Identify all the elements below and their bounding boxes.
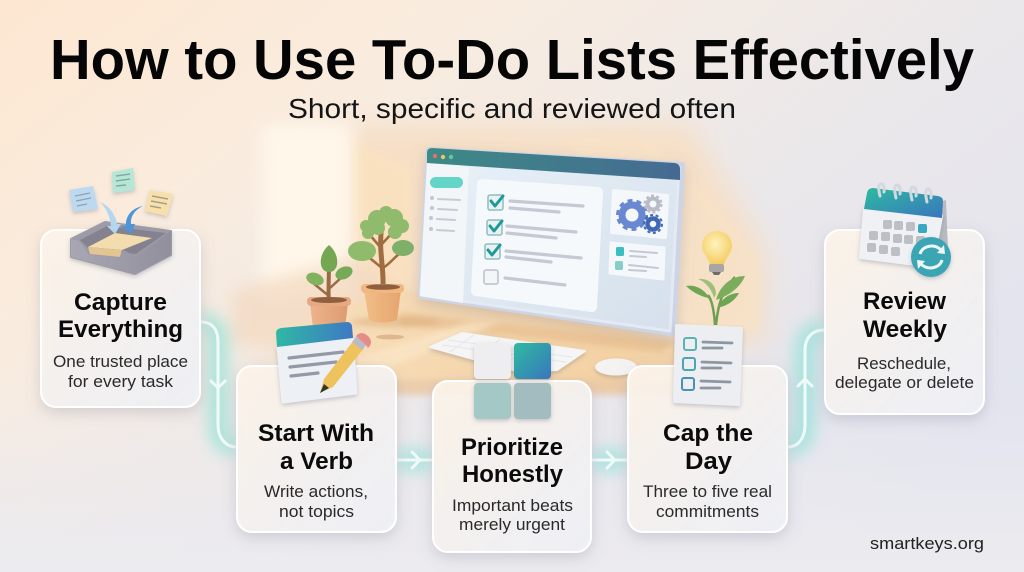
heading: Prioritize	[461, 434, 563, 461]
connectors	[201, 322, 824, 468]
desk	[235, 290, 705, 392]
icon: note and pencil	[276, 322, 371, 402]
heading	[663, 420, 753, 475]
heading: Day	[685, 448, 733, 475]
heading: Capture	[74, 289, 167, 316]
card: Capture Everything	[41, 168, 200, 407]
icon: inbox tray with notes	[69, 168, 173, 274]
description: not topics	[279, 503, 354, 521]
title bar	[427, 148, 680, 180]
icon: bulb and plant checklist	[675, 231, 745, 404]
description: delegate or delete	[835, 374, 974, 392]
keyboard	[430, 333, 585, 372]
card: Start With a Verb	[237, 322, 396, 532]
heading: a Verb	[280, 448, 353, 475]
small potted plant	[304, 245, 355, 328]
description: commitments	[656, 503, 759, 521]
window light beam	[262, 125, 352, 300]
card: Review Weekly	[825, 184, 984, 414]
sidebar	[420, 163, 469, 303]
description	[53, 353, 188, 391]
desk scene background	[232, 125, 765, 396]
window controls	[433, 154, 453, 159]
heading	[461, 434, 564, 488]
description: for every task	[68, 373, 174, 391]
task panel	[476, 184, 598, 307]
description: merely urgent	[459, 516, 565, 534]
legend panel	[610, 243, 664, 279]
heading: Cap the	[663, 420, 753, 447]
icon: calendar with refresh badge	[861, 184, 951, 277]
sidebar menu	[429, 177, 463, 231]
description	[835, 355, 974, 392]
description: Reschedule,	[857, 355, 951, 373]
heading	[58, 289, 183, 343]
icon: priority matrix	[474, 343, 551, 419]
heading	[258, 420, 374, 475]
card: Cap the Day	[628, 231, 787, 532]
description: One trusted place	[53, 353, 188, 371]
large potted tree	[348, 206, 414, 322]
heading: Weekly	[863, 316, 948, 343]
description	[264, 483, 368, 521]
heading: Honestly	[462, 461, 564, 488]
title: How to Use To-Do Lists Effectively	[50, 28, 974, 92]
mouse	[595, 358, 637, 376]
description	[643, 483, 772, 521]
gear panel	[612, 191, 667, 237]
website credit: smartkeys.org	[870, 534, 984, 553]
description	[452, 497, 573, 534]
heading: Everything	[58, 316, 183, 343]
heading: Start With	[258, 420, 374, 447]
monitor	[420, 148, 682, 333]
low wall ledge	[232, 258, 420, 345]
subtitle: Short, specific and reviewed often	[288, 93, 736, 124]
description: Important beats	[452, 497, 573, 515]
card: Prioritize Honestly	[433, 343, 591, 552]
description: Three to five real	[643, 483, 772, 501]
heading	[863, 288, 948, 343]
heading: Review	[863, 288, 946, 315]
description: Write actions,	[264, 483, 368, 501]
wall warm glow	[345, 125, 765, 345]
